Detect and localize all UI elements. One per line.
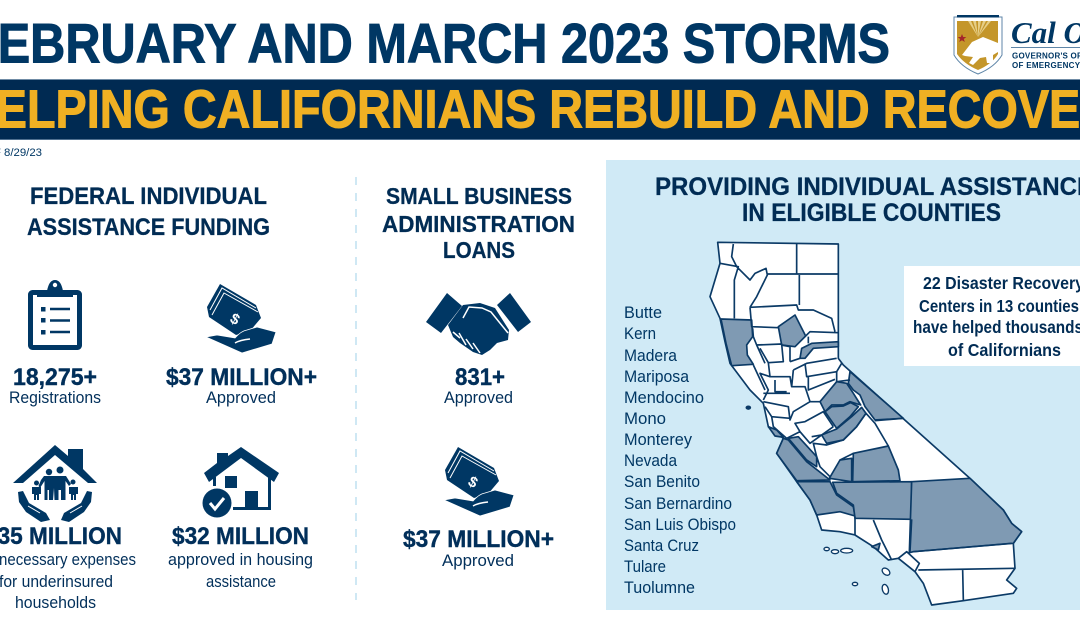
county list: Kern bbox=[624, 325, 656, 343]
stat: 32 million housing: $32 MILLION bbox=[172, 523, 309, 550]
icon: money in hand bbox=[206, 284, 276, 353]
heading: providing individual assistance: IN ELIGIBLE COUNTIES bbox=[742, 199, 1001, 227]
stat: 32 million housing: assistance bbox=[206, 572, 276, 591]
callout: disaster recovery centers: of Californians bbox=[948, 340, 1061, 360]
county list bbox=[624, 304, 736, 597]
icon: house with check bbox=[202, 447, 279, 518]
county list: Mono bbox=[624, 410, 666, 428]
heading: providing individual assistance bbox=[655, 173, 1080, 227]
county list: Madera bbox=[624, 347, 678, 365]
heading: small business administration loans: ADMINISTRATION bbox=[382, 211, 575, 237]
stat: 35 million: necessary expenses bbox=[0, 550, 136, 569]
county list: San Luis Obispo bbox=[624, 516, 736, 534]
stat: 35 million bbox=[0, 523, 136, 612]
icon: money in hand bbox=[444, 447, 514, 516]
logo: Cal OES bbox=[954, 15, 1080, 74]
stat: 831 approved bbox=[444, 364, 513, 407]
stat: 831 approved: Approved bbox=[444, 388, 513, 407]
icon: money in hand: $ bbox=[465, 473, 481, 492]
map: California counties bbox=[710, 242, 1022, 605]
icon: money in hand: $ bbox=[227, 310, 243, 329]
county list: Butte bbox=[624, 304, 662, 322]
heading: federal individual assistance bbox=[27, 183, 270, 241]
stat: 37 million approved: Approved bbox=[206, 388, 276, 407]
county list: Tulare bbox=[624, 558, 666, 576]
stat: registrations bbox=[9, 364, 101, 407]
county list: Monterey bbox=[624, 431, 693, 449]
county list: San Benito bbox=[624, 473, 700, 491]
stat: 37 million approved: $37 MILLION+ bbox=[166, 364, 317, 391]
county list: San Bernardino bbox=[624, 495, 732, 513]
stat: 831 approved: 831+ bbox=[455, 364, 505, 391]
stat: 35 million: for underinsured bbox=[0, 572, 113, 591]
county list: Tuolumne bbox=[624, 579, 695, 597]
stat: 37 million approved bbox=[166, 364, 317, 407]
stat: SBA 37 million bbox=[403, 526, 554, 570]
stat: 35 million: households bbox=[15, 593, 96, 612]
stat: 32 million housing bbox=[168, 523, 313, 591]
stat: SBA 37 million: $37 MILLION+ bbox=[403, 526, 554, 553]
icon: handshake bbox=[426, 293, 531, 355]
heading: small business administration loans: LOANS bbox=[443, 237, 515, 263]
heading: federal individual assistance: ASSISTANCE FUNDING bbox=[27, 214, 270, 241]
stat: registrations: 18,275+ bbox=[13, 364, 97, 391]
panel: eligible counties bbox=[606, 160, 1080, 610]
icon: clipboard bbox=[30, 280, 80, 348]
stat: registrations: Registrations bbox=[9, 388, 101, 407]
heading: federal individual assistance: FEDERAL INDIVIDUAL bbox=[30, 183, 267, 210]
heading: small business administration loans bbox=[382, 183, 575, 263]
county list: Nevada bbox=[624, 452, 678, 470]
stat: 32 million housing: approved in housing bbox=[168, 550, 313, 569]
stat: SBA 37 million: Approved bbox=[442, 551, 514, 570]
heading: small business administration loans: SMALL BUSINESS bbox=[386, 183, 572, 209]
icon: family in house with hands bbox=[13, 445, 97, 522]
county list: Mariposa bbox=[624, 368, 690, 386]
county list: Santa Cruz bbox=[624, 537, 699, 555]
county list: Mendocino bbox=[624, 389, 704, 407]
callout: disaster recovery centers bbox=[904, 266, 1080, 366]
